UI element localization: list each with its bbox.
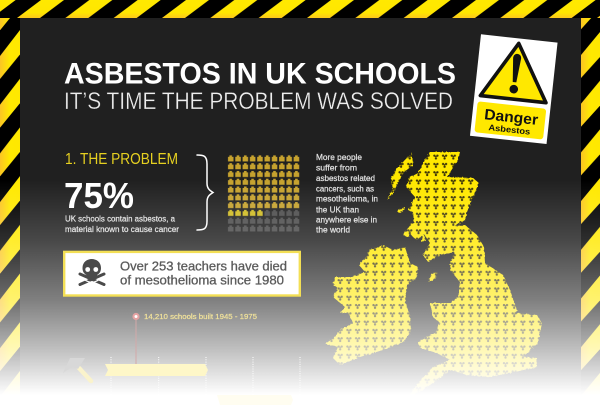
timeline ribbon: 1945-1975	[105, 364, 208, 376]
icon: skull and crossbones	[80, 259, 104, 284]
heading: the problem: 1. THE PROBLEM	[65, 151, 178, 168]
icon: hammer	[63, 358, 91, 381]
text: more people suffer: anywhere else in	[316, 215, 377, 225]
timeline ribbon: lower	[217, 395, 293, 405]
icon: danger asbestos sign: Asbestos	[488, 122, 531, 137]
timeline marker: schools built: 14,210 schools built 1945 - 1975	[144, 312, 257, 321]
text: more people suffer: asbestos related	[316, 173, 375, 183]
curly brace	[197, 155, 213, 230]
subtitle: IT’S TIME THE PROBLEM WAS SOLVED	[64, 88, 453, 115]
icon: danger asbestos sign	[470, 34, 558, 144]
icon: danger asbestos sign: Danger	[483, 106, 539, 129]
map: UK and Ireland with biohazard pattern	[325, 152, 542, 389]
title: ASBESTOS IN UK SCHOOLS	[64, 58, 456, 90]
text: more people suffer: More people	[316, 152, 362, 162]
text: more people suffer: the world	[316, 225, 350, 235]
text: schools contain asbestos	[65, 214, 179, 234]
statistic: 75%: 75%	[64, 175, 134, 216]
text: callout copy	[120, 259, 287, 288]
text: callout copy: Over 253 teachers have died	[120, 259, 287, 274]
callout: teachers died	[64, 252, 300, 296]
text: callout copy: of mesothelioma since 1980	[120, 273, 284, 288]
text: more people suffer: mesothelioma, in	[316, 194, 378, 204]
text: schools contain asbestos: material known to cause cancer	[65, 224, 179, 234]
pictogram: 100 school buildings, 75 highlighted	[227, 154, 300, 232]
text: schools contain asbestos: UK schools contain asbestos, a	[65, 214, 175, 224]
text: more people suffer: the UK than	[316, 204, 359, 214]
timeline marker: schools built	[132, 312, 257, 365]
icon: white circle at bottom	[69, 396, 87, 405]
text: more people suffer	[316, 152, 378, 235]
timeline grid: dotted year lines	[111, 357, 300, 400]
text: more people suffer: cancers, such as	[316, 183, 374, 193]
text: more people suffer: suffer from	[316, 163, 357, 173]
